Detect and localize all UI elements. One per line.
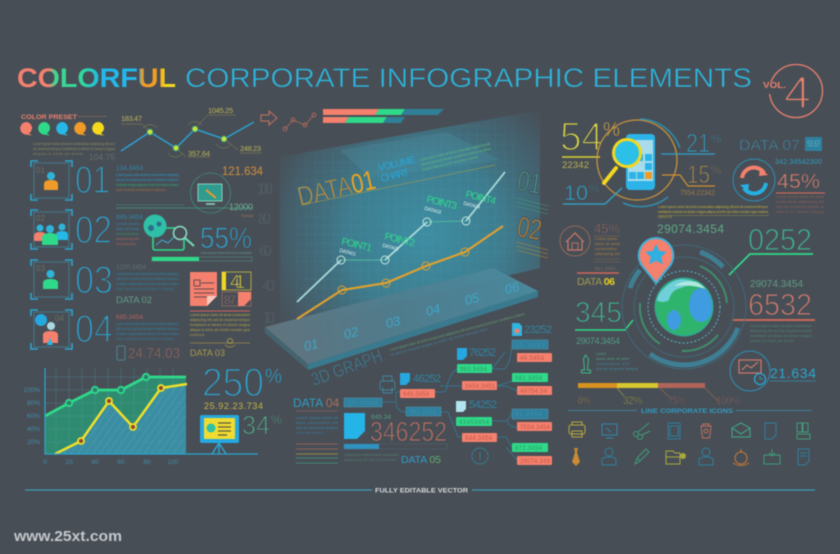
color preset legend: COLOR PRESET <box>21 114 77 121</box>
stat: 12000: 12000 <box>229 202 253 212</box>
box <box>406 407 441 416</box>
panel: item 04 <box>31 308 179 351</box>
panel: item 02: 02 <box>75 209 112 252</box>
panel: item 02: consectetur <box>116 232 140 236</box>
panel: item 01: 01 <box>75 159 110 202</box>
point 1 label: POINT1 <box>340 236 373 255</box>
chart x axis labels: 40 <box>91 459 99 466</box>
stat: 10%: 10 <box>564 182 588 205</box>
panel: item 01: 01 <box>36 166 45 175</box>
badge: vol 4 <box>762 64 822 118</box>
label: data 03 with pin <box>190 338 250 358</box>
box: 87: 87 <box>224 293 236 307</box>
stat: 10% <box>563 182 622 205</box>
swatch: green <box>38 122 50 136</box>
point 1 label <box>339 236 373 261</box>
color preset legend <box>20 114 107 136</box>
box <box>517 353 552 362</box>
icon: person green <box>43 270 58 289</box>
icon: inbox <box>764 449 780 464</box>
line chart: top left: 357.64 <box>188 149 210 158</box>
icon: person orange <box>44 172 58 190</box>
icon grid <box>569 422 810 466</box>
label: data 07: DATA 07 <box>739 137 800 154</box>
box: 41 <box>222 272 251 292</box>
point 3 label <box>424 194 458 219</box>
orange line series <box>297 226 503 319</box>
panel: item 01: elit sed do eiusmod tempor incididunt ut labore <box>116 178 179 182</box>
box: 237.34343 <box>347 401 379 407</box>
icon: phone and magnifier <box>597 119 680 207</box>
panel: item 04: elit sed do eiusmod tempor incididunt ut labore <box>116 327 179 331</box>
chart y axis labels <box>23 387 40 446</box>
label: data 03 with pin: DATA 03 <box>190 348 225 358</box>
label: data 02: DATA 02 <box>116 295 152 306</box>
point 1 label: DATA01 <box>339 248 357 258</box>
chart floor <box>265 268 538 370</box>
point 2 label: DATA02 <box>382 243 400 253</box>
3D graph caption: et dolore magna aliqua ut enim ad minim veniam quis <box>391 327 488 357</box>
tick 75%: 75% <box>668 395 685 407</box>
text block: yellow note: adipiscing elit sed do eiusmod tempor <box>190 318 251 322</box>
icon: trash <box>701 424 711 438</box>
panel: item 01: quis nostrud exercitation ullamco <box>116 188 166 192</box>
chart x axis labels: 100 <box>168 459 179 466</box>
stat: 45% house <box>594 221 620 271</box>
panel: data 05: adipiscing elit sed do eiusmod <box>344 458 396 462</box>
panel: data 04: DATA 04 <box>293 396 340 410</box>
panel: item 03: 03 <box>36 264 45 273</box>
stat: 0252: 0252 <box>748 222 812 257</box>
box: 945.3454 <box>403 392 430 398</box>
chart y axis labels: 40% <box>27 426 40 433</box>
stat: 34%: 34 <box>242 410 270 440</box>
wall caption: Lorem ipsum dolor sit amet consectetur adipiscing elit <box>419 142 490 162</box>
stat: 45% house: Lorem ipsum <box>595 237 617 241</box>
box <box>517 456 552 465</box>
faint axis numbers <box>256 181 275 327</box>
stat: 6532: aliqua ut enim ad minim <box>750 339 794 343</box>
data point 1 <box>147 129 153 135</box>
node: 54252 <box>456 399 497 412</box>
label: data 06: DATA 06 <box>577 276 615 288</box>
icon: person coral with speech <box>35 314 58 345</box>
icon: network nodes <box>283 113 316 131</box>
stat: 54%: 54 <box>560 115 603 159</box>
node: 46252: 46252 <box>413 373 441 385</box>
text block: yellow note: aliqua ut enim ad minim veniam quis <box>190 328 250 332</box>
tick 100%: 100% <box>716 395 740 407</box>
icon: mail <box>732 423 750 437</box>
stat: 45% refresh: 45% <box>777 171 820 193</box>
icon: chart in circle <box>730 351 770 391</box>
stat: 6532: Lorem ipsum dolor sit amet consectetur <box>750 324 813 328</box>
floor labels <box>302 279 522 354</box>
stat: 45% refresh: sed do eiusmod tempor in <box>776 205 824 209</box>
wall heading: volume chart <box>377 155 419 185</box>
stat: 54% <box>560 115 620 171</box>
stat: 15%: 7554.22342 <box>680 190 715 197</box>
box <box>512 409 548 419</box>
icon and text: lighthouse note: sed do eiusmod tempor <box>596 367 639 371</box>
stat: 29074.3454 top: 29074.3454 <box>657 222 724 236</box>
panel: data 04: amet consectetur elit <box>296 421 338 425</box>
icon: house in circle <box>560 226 590 256</box>
panel: item 01 <box>31 159 179 202</box>
stat: 15% <box>662 161 721 197</box>
icon: monitor in circle <box>190 173 230 213</box>
box: 7554.3454 <box>520 425 551 431</box>
stat: 6532: incididunt ut labore et dolore magna <box>750 334 812 338</box>
stat: 45% refresh <box>775 159 825 214</box>
box <box>512 340 548 349</box>
stat: 45% house: $61.3454 <box>595 266 615 271</box>
panel: item 04: quis nostrud exercitation ullamco <box>116 337 174 341</box>
panel: item 02: Lorem ipsum <box>116 222 139 226</box>
icon: refresh <box>733 159 775 201</box>
text block: yellow paragraph: Lorem ipsum dolor sit amet consectetur adipiscing elit sed do eiusmod tempor <box>658 205 769 209</box>
panel: item 04: 04 <box>75 308 113 351</box>
panel: data 04: incididunt <box>296 431 323 435</box>
watermark: www.25xt.com <box>13 529 122 545</box>
section label: line corporate icons: LINE CORPORATE ICONS <box>641 408 733 415</box>
text block: preset note: 104.75 <box>89 153 116 162</box>
node: 23252 <box>512 323 552 336</box>
point 4 label: DATA04 <box>463 201 481 211</box>
box: 33.3454 <box>515 343 546 349</box>
panel: item 02: dolor sit amet <box>116 227 139 231</box>
faint axis numbers: 40 <box>262 278 275 295</box>
swatch: orange <box>74 122 86 136</box>
chart x axis labels: 0 <box>43 459 47 466</box>
stat: 45% house: consectetur <box>595 247 618 251</box>
wall caption: sed do eiusmod tempor incididunt ut labore et dolore <box>420 147 492 167</box>
stacked bars <box>323 109 444 123</box>
box <box>457 364 492 373</box>
footer rule with caption: FULLY EDITABLE VECTOR <box>375 488 468 494</box>
box: 982.3454 <box>515 376 543 382</box>
faint axis numbers: 60 <box>259 243 272 260</box>
panel: item 03: Lorem ipsum dolor sit amet consectetur adipiscing <box>116 272 179 276</box>
stat: 6532: adipiscing elit sed do eiusmod tempor <box>750 329 813 333</box>
badge: vol 4: VOL. <box>763 81 786 90</box>
data point 3 <box>192 126 198 132</box>
stat: 55% <box>152 222 253 261</box>
icon: tie <box>572 448 580 466</box>
panel: data 05 <box>344 413 447 466</box>
stat: 34%: % <box>271 412 282 427</box>
icon: chart doc <box>797 423 810 439</box>
panel: item 03: et dolore magna aliqua ut enim ad minim veniam <box>116 282 179 286</box>
icon and text: lighthouse note <box>582 352 639 373</box>
stat: 55%: Lorem ipsum dolor sit amet consectetur <box>200 251 253 255</box>
node: 76252 <box>457 347 496 360</box>
panel: item 02: 02 <box>36 214 45 223</box>
stat: 54%: % <box>603 119 620 141</box>
label: data 07 <box>739 137 822 154</box>
box: 29074.349 <box>520 459 551 465</box>
stat: 45% house: dolor sit amet <box>595 242 620 246</box>
panel: item 03: quis nostrud exercitation ullamco <box>116 287 174 291</box>
chart x axis labels: 80 <box>143 459 151 466</box>
box: 41: 41 <box>230 272 245 292</box>
panel: item 04: 04 <box>55 314 64 323</box>
box <box>512 373 548 382</box>
floor labels: 01 <box>302 336 320 354</box>
stat: 250%: 250 <box>202 361 264 405</box>
stat: 21.634: 21.634 <box>770 365 816 381</box>
panel: item 02: 945.3454 <box>116 214 143 221</box>
stat: 45% refresh: labore et dolore magna <box>776 210 824 214</box>
box: 983.3454 <box>409 410 437 416</box>
panel: item 03 <box>31 259 179 306</box>
panel: item 01: et dolore magna aliqua ut enim ad minim veniam <box>116 183 179 187</box>
box <box>517 386 552 395</box>
earth <box>654 278 714 336</box>
panel: data 05: 945.34 <box>371 414 391 421</box>
line chart: top left: 183.47 <box>121 114 142 123</box>
3D graph heading: 3D GRAPH <box>309 346 385 390</box>
box <box>462 381 497 390</box>
icon: coral document <box>190 272 217 306</box>
stat: 6532 <box>733 279 815 343</box>
chart x axis labels <box>43 459 179 466</box>
icon: info circle <box>472 448 488 464</box>
panel: item 02: adipiscing elit <box>116 237 139 241</box>
wall caption: magna aliqua ut enim ad minim veniam <box>422 155 479 172</box>
text block: yellow note <box>190 311 251 337</box>
stat: 12000: Total <box>241 213 253 218</box>
stat: 345 <box>575 297 633 346</box>
stat: 21% <box>661 128 721 158</box>
box: 982.3454 <box>460 367 488 373</box>
icon: presentation board <box>200 415 239 454</box>
node: 54252: 54252 <box>469 399 497 411</box>
side note: 02: 02 <box>515 211 544 247</box>
icon: person <box>699 448 713 465</box>
stat: 45% house: 45% <box>594 221 620 236</box>
wall heading: data01: DATA <box>295 170 355 212</box>
title: COLORFUL <box>17 63 176 93</box>
icon and text: lighthouse note: ipsum dolor sit amet <box>596 357 629 361</box>
stat: 21%: % <box>711 132 721 146</box>
stat: 345: 29074.3454 <box>576 336 620 346</box>
data point 2 <box>173 145 179 151</box>
chart y axis labels: 80% <box>27 400 40 407</box>
stat: 45% refresh: consectetur adipiscing elit <box>776 200 824 204</box>
faint axis numbers: 100 <box>256 181 273 198</box>
title: CORPORATE INFOGRAPHIC ELEMENTS <box>185 63 752 93</box>
text block: preset note: do eiusmod tempor incididunt ut labore et dolore magna <box>33 147 115 151</box>
icon: printer <box>569 422 585 437</box>
panel: item 04: 685.3454 <box>116 314 143 321</box>
side note: 01 <box>515 165 548 214</box>
stat: 45% refresh: Lorem ipsum dolor sit amet <box>776 195 824 199</box>
swatch: coral <box>20 122 32 136</box>
text block: yellow note: Lorem ipsum dolor sit amet consectetur <box>190 313 251 317</box>
text block: preset note: aliqua ut enim ad minim <box>33 152 83 156</box>
box: 3454.3451 <box>465 384 496 390</box>
stat: 21%: 21 <box>686 128 710 158</box>
box <box>456 417 492 426</box>
yellow series points <box>78 385 164 444</box>
floor labels: 04 <box>424 301 442 319</box>
tick 32%: 32% <box>623 395 642 407</box>
box: 49754.54 <box>520 389 548 395</box>
node: 76252: 76252 <box>469 347 496 359</box>
box <box>400 389 435 398</box>
floor labels: 05 <box>463 290 482 308</box>
box <box>344 398 382 407</box>
panel: item 03: 03 <box>75 259 113 302</box>
icon: monitor <box>602 424 617 438</box>
panel: item 03: 1230.3454 <box>116 264 146 271</box>
text block: yellow paragraph <box>658 205 769 219</box>
chart x axis labels: 60 <box>117 459 125 466</box>
point 2 label: POINT2 <box>383 231 416 250</box>
data point 4 <box>221 136 227 142</box>
icon: printer <box>380 376 395 393</box>
wall caption <box>419 142 493 172</box>
floor labels: 06 <box>503 279 522 297</box>
box: 872.3454 <box>515 446 543 452</box>
stat: 250%: 25.92.23.734 <box>204 401 263 411</box>
point 2 label <box>382 231 416 256</box>
stat: phone 24.74.03: 24.74.03 <box>128 345 180 362</box>
panel: item 02: sed eiusmod <box>116 242 136 246</box>
panel: item 01: Lorem ipsum dolor sit amet consectetur adipiscing <box>116 173 179 177</box>
stat: 10%: % <box>589 183 599 195</box>
panel: item 02 <box>31 209 143 252</box>
node: 46252 <box>400 373 441 385</box>
wall heading: data01: 01 <box>348 165 378 199</box>
stat: 121.634: 121.634 <box>222 164 263 178</box>
icon: pen <box>635 449 649 464</box>
stat: 250%: % <box>265 365 282 388</box>
box <box>517 422 552 431</box>
text block: preset note <box>33 142 116 162</box>
floor labels: 02 <box>342 324 361 342</box>
stat: 0252 <box>729 222 813 275</box>
chart wall <box>280 110 540 330</box>
icon: blue note <box>344 413 365 439</box>
tick 0%: 0% <box>578 395 590 407</box>
panel: item 04: Lorem ipsum dolor sit amet consectetur adipiscing <box>116 322 179 326</box>
point 4 label: POINT4 <box>464 189 497 208</box>
box: 544.3454 <box>465 436 493 442</box>
side note: 01: 01 <box>515 165 544 201</box>
wall heading: volume chart: VOLUME <box>377 155 417 174</box>
panel: data 04: sed do eiusmod tempor <box>296 426 339 430</box>
line chart: top left: 248.23 <box>240 144 261 153</box>
chart y axis labels: 60% <box>27 413 40 420</box>
badge: vol 4: 4 <box>784 67 811 118</box>
icon: analytics magnifier <box>144 214 194 250</box>
panel: data 05: Lorem ipsum dolor sit amet consectetur <box>344 453 400 457</box>
stat: 6532: 6532 <box>748 287 812 322</box>
point 4 label <box>463 189 497 214</box>
panel: data 05: DATA 05 <box>401 454 441 466</box>
panel: item 04: et dolore magna aliqua ut enim ad minim veniam <box>116 332 179 336</box>
tree diagram <box>344 323 552 465</box>
icon and text: lighthouse note: Lorem <box>596 352 606 356</box>
icon: team <box>34 224 68 245</box>
faint axis numbers: 80 <box>258 211 271 228</box>
panel: data 04: Lorem ipsum dolor sit <box>296 416 338 420</box>
stat: 54%: 22342 <box>562 160 589 171</box>
tree connectors <box>382 347 517 460</box>
node: 23252: 23252 <box>524 324 552 336</box>
stat: 55%: 55% <box>200 222 252 255</box>
stat: 15%: % <box>711 163 721 177</box>
text block: yellow paragraph: incididunt ut labore et dolore magna aliqua ut enim ad minim veniam quis nostrud <box>658 210 768 214</box>
pin with star <box>639 238 673 283</box>
box <box>462 433 497 442</box>
panel: data 05: 346252 <box>370 416 447 447</box>
point 3 label: DATA03 <box>424 206 442 216</box>
stat: 345: 345 <box>575 297 622 329</box>
box: 43453454 <box>459 420 490 426</box>
line chart: top left: 1045.25 <box>208 106 233 115</box>
box <box>512 443 548 452</box>
green series points <box>66 374 149 406</box>
panel: 3D graph <box>265 110 540 370</box>
stat: 15%: 15 <box>687 161 710 189</box>
faint axis numbers: 10 <box>262 310 275 327</box>
text block: yellow note: nostrud <box>190 333 204 337</box>
panel: data 04 <box>293 396 340 463</box>
3D graph caption: Lorem ipsum dolor sit amet consectetur adipiscing elit sed do eiusmod tempor incididunt ut labore <box>389 312 525 352</box>
icon: outline arrow <box>261 111 277 125</box>
line chart: top left <box>121 106 262 158</box>
floor labels: 03 <box>384 313 403 331</box>
text block: yellow note: incididunt ut labore et dolore magna <box>190 323 250 327</box>
box: 87 <box>222 292 251 307</box>
chart y axis labels: 100% <box>23 387 40 394</box>
chart y axis labels: 20% <box>27 439 40 446</box>
swatch: blue <box>56 122 68 136</box>
globe diagram <box>622 238 746 369</box>
wall heading: volume chart: CHART <box>380 167 410 185</box>
panel: item 03: elit sed do eiusmod tempor incididunt ut labore <box>116 277 179 281</box>
icon: scissors <box>634 423 650 440</box>
text block: yellow paragraph: laboris <box>658 215 672 219</box>
stat: 45% house: adipiscing elit <box>595 252 620 256</box>
light line series <box>297 172 505 302</box>
icon: folder <box>666 451 686 464</box>
area chart <box>23 368 258 466</box>
progress bar <box>578 383 740 407</box>
stat: 45% refresh: 342.34542300 <box>775 159 822 166</box>
box: 91.3454 <box>515 412 543 418</box>
stat: 6532: 29074.3454 <box>750 279 803 290</box>
icon: document <box>798 449 809 465</box>
stat: 12000 <box>116 202 253 218</box>
icon: tablet <box>668 423 680 439</box>
icon: cup <box>733 449 749 466</box>
text block: preset note: Lorem ipsum dolor sit amet consectetur adipiscing elit sed <box>33 142 115 146</box>
swatch: yellow <box>92 122 104 136</box>
icon and text: lighthouse note: consectetur elit <box>596 362 629 366</box>
icon: person <box>602 448 616 465</box>
chart x axis labels: 20 <box>65 459 73 466</box>
panel: item 01: 134.3454 <box>116 165 143 172</box>
icon: document <box>765 423 776 439</box>
point 3 label: POINT3 <box>425 194 458 213</box>
box: 46.5454 <box>520 356 545 362</box>
